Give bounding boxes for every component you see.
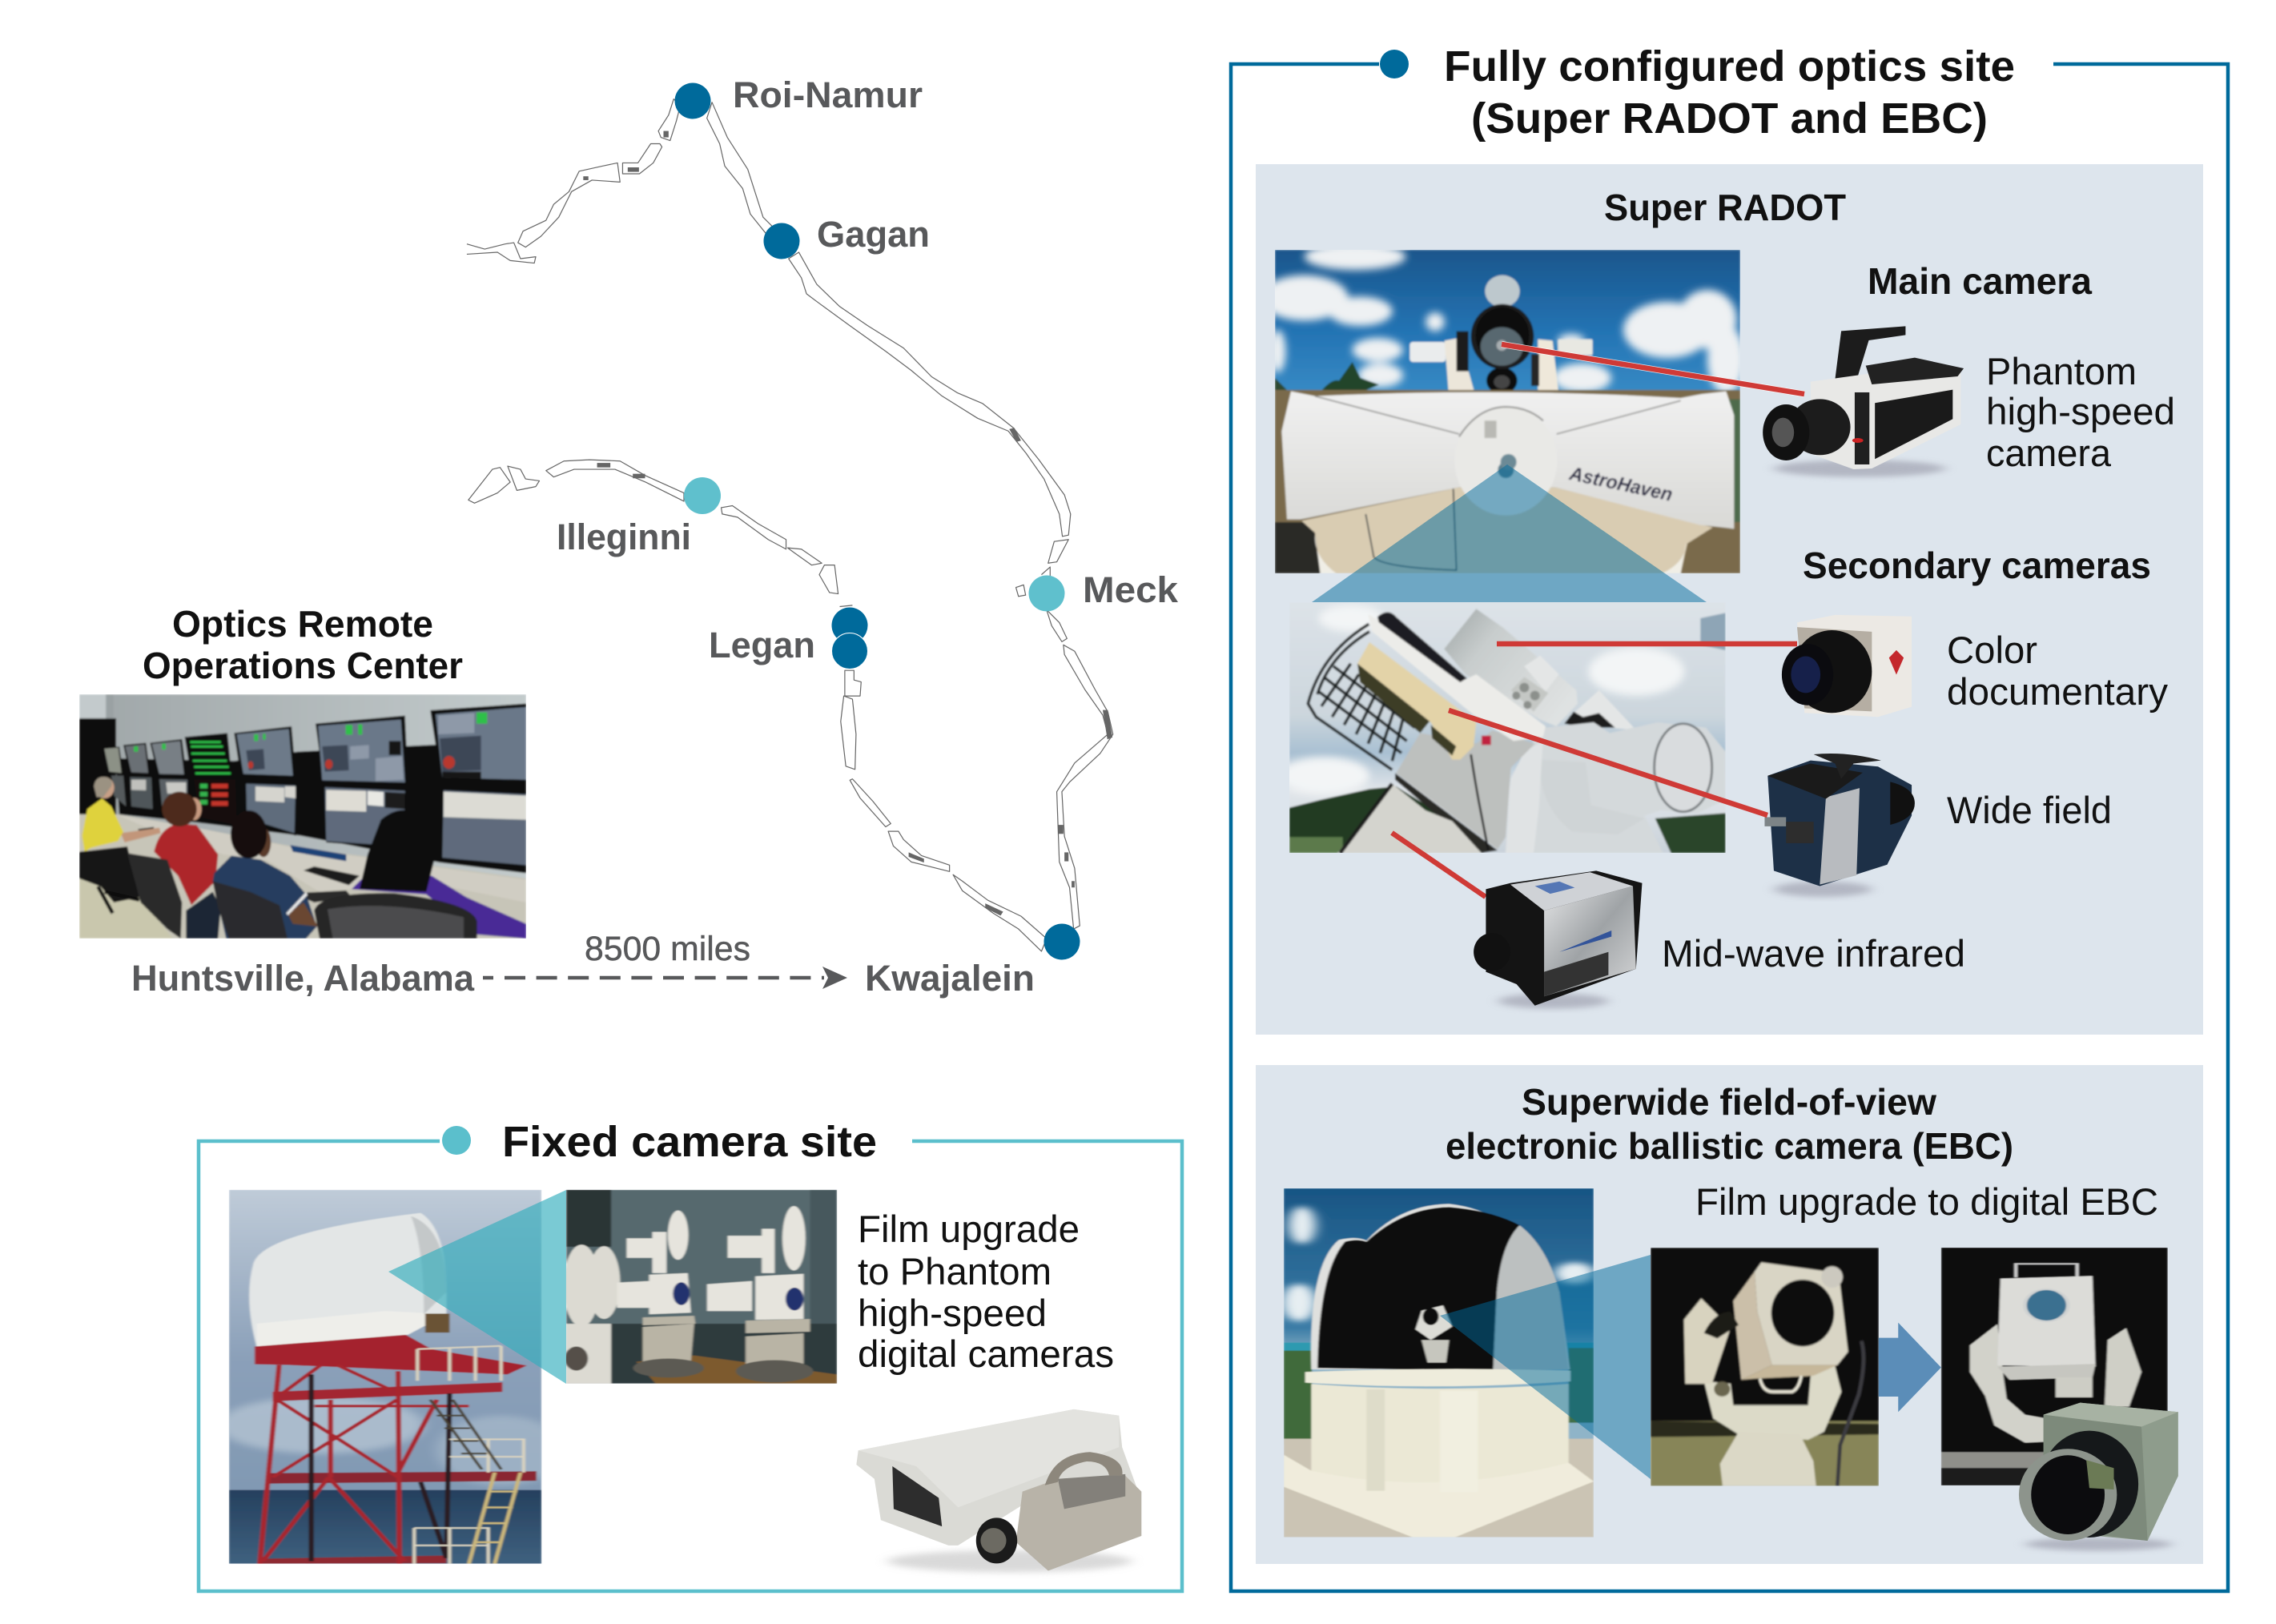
heading: Optics Remote Operations Center: Operations Center <box>143 645 463 686</box>
heading: fully configured optics site: (Super RADOT and EBC) <box>1471 94 1988 143</box>
text: Color documentary <box>1947 629 2169 713</box>
leader line: wide field <box>1449 710 1767 815</box>
heading: Main camera: Main camera <box>1868 260 2092 302</box>
heading: Fixed camera site: Fixed camera site <box>502 1118 877 1166</box>
text: Phantom high-speed camera: Phantom <box>1986 350 2137 392</box>
label: Legan: Legan <box>709 625 815 665</box>
atoll island outlines <box>467 99 1113 951</box>
photo: Phantom camera in Pelco housing <box>856 1409 1141 1572</box>
marker: fully configured site <box>1380 50 1409 78</box>
label: Roi-Namur: Roi-Namur <box>733 74 923 115</box>
photo: wide field camera <box>1764 754 1915 897</box>
heading: Optics Remote Operations Center <box>143 603 463 686</box>
lower monitors <box>324 785 406 849</box>
panel: fixed camera site <box>199 1118 1182 1591</box>
site marker: Illeginni <box>684 477 721 514</box>
photo: camera tower <box>218 1190 565 1564</box>
text: Mid-wave infrared: Mid-wave infrared <box>1662 932 1965 975</box>
text: Phantom high-speed camera: camera <box>1986 432 2112 474</box>
callout wedge: tower to film cameras <box>388 1190 566 1384</box>
text: film upgrade note: Film upgrade <box>858 1208 1080 1250</box>
photo: Super RADOT dome: AstroHaven <box>1566 463 1675 506</box>
desk <box>119 816 526 902</box>
site marker: Kwajalein <box>1044 924 1080 959</box>
panel: superwide EBC <box>1256 1065 2203 1564</box>
panel: Super RADOT <box>1256 164 2203 1035</box>
site markers: Legan <box>831 607 868 669</box>
text: film upgrade to digital EBC: Film upgrade to digital EBC <box>1695 1180 2158 1223</box>
text: film upgrade note: digital cameras <box>858 1333 1114 1375</box>
heading: superwide EBC: electronic ballistic camera (EBC) <box>1446 1125 2013 1167</box>
photo: telescope mount <box>1279 602 1726 853</box>
dashed arrow: Huntsville to Kwajalein <box>483 967 847 989</box>
map: Kwajalein Atoll <box>467 74 1179 999</box>
photo: film cameras <box>564 1190 837 1384</box>
photo: EBC dome <box>1282 1188 1594 1538</box>
photo: color documentary camera <box>1782 615 1912 717</box>
photo: digital EBC camera <box>1941 1248 2168 1485</box>
heading: Secondary cameras: Secondary cameras <box>1803 545 2151 586</box>
heading: superwide EBC: Superwide field-of-view <box>1522 1081 1936 1123</box>
text: Color documentary: Color <box>1947 629 2037 671</box>
photo: operations center control room <box>79 694 526 939</box>
leader line: mid-wave infrared <box>1392 833 1486 897</box>
callout wedge: dome to EBC camera <box>1440 1255 1651 1479</box>
label: 8500 miles: 8500 miles <box>585 930 750 968</box>
site marker: Roi-Namur <box>674 83 711 119</box>
arrow: upgrade direction <box>1879 1323 1941 1412</box>
text: Color documentary: documentary <box>1947 670 2169 713</box>
heading: fully configured optics site <box>1444 42 2015 143</box>
heading: Super RADOT: Super RADOT <box>1604 187 1846 228</box>
leader line: main camera <box>1502 344 1804 394</box>
label: Meck: Meck <box>1083 569 1179 610</box>
callout wedge: dome to telescope <box>1312 464 1707 602</box>
photo: digital camera body <box>2019 1403 2178 1551</box>
photo: film EBC camera <box>1651 1248 1879 1486</box>
text: film upgrade note: high-speed <box>858 1292 1047 1334</box>
site marker: Gagan <box>764 223 799 259</box>
site marker: Meck <box>1028 575 1065 612</box>
photo: mid-wave infrared camera <box>1474 870 1642 1009</box>
heading: superwide EBC <box>1446 1081 2013 1167</box>
marker: fixed site <box>442 1126 471 1155</box>
label: Huntsville, Alabama: Huntsville, Alabama <box>131 958 475 999</box>
label: Kwajalein: Kwajalein <box>865 958 1035 999</box>
heading: fully configured optics site: Fully configured optics site <box>1444 42 2015 90</box>
photo: Super RADOT dome <box>1261 243 1745 573</box>
heading: Optics Remote Operations Center: Optics Remote <box>172 603 433 645</box>
label: Gagan: Gagan <box>817 214 930 255</box>
label: Illeginni: Illeginni <box>557 517 691 557</box>
operators <box>121 828 161 842</box>
text: film upgrade note: to Phantom <box>858 1250 1052 1292</box>
panel: fully configured optics site <box>1231 42 2228 1591</box>
photo: Phantom high-speed camera <box>1763 326 1964 477</box>
text: Phantom high-speed camera: high-speed <box>1986 390 2175 432</box>
text: Wide field: Wide field <box>1947 789 2112 831</box>
text: film upgrade note <box>858 1208 1114 1375</box>
text: Phantom high-speed camera <box>1986 350 2175 474</box>
upper monitors <box>316 716 408 784</box>
leader line: color documentary <box>1497 641 1797 646</box>
